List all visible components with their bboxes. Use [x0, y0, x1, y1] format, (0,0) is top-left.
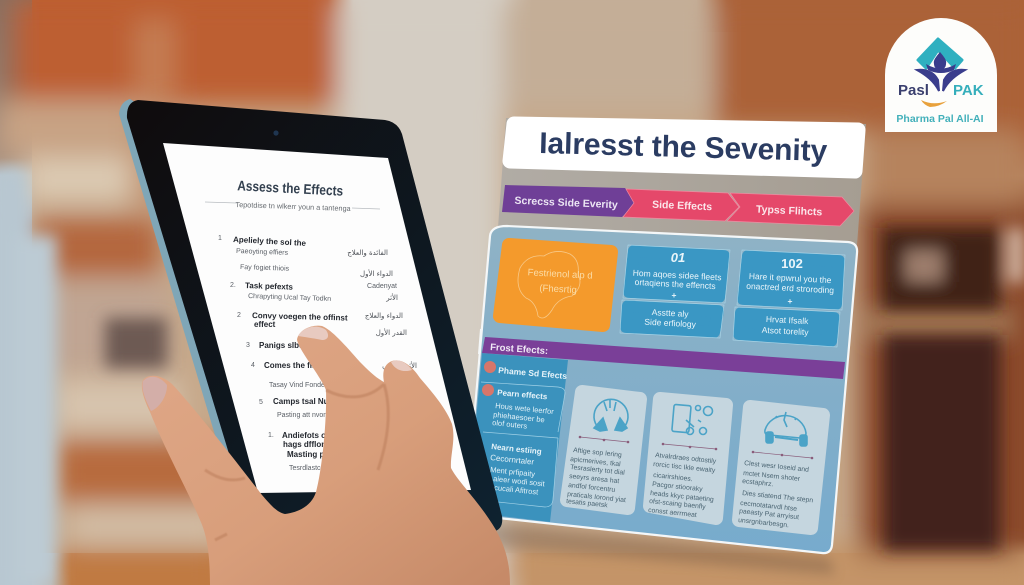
list block: nearn estiing: aieer wodi sosit — [493, 474, 546, 488]
divider with dots — [579, 436, 629, 443]
numbered list: 4 — [251, 362, 255, 369]
effect card 3: mctet Nsem shoter — [743, 470, 801, 483]
effect card 1 — [566, 392, 640, 509]
divider with dots — [752, 451, 813, 459]
numbered list: 2 — [237, 312, 241, 319]
effect card 1: praticals Iorond yiat — [567, 491, 626, 504]
middle finger nail — [391, 360, 412, 371]
badge: pharma side effects — [484, 361, 568, 381]
numbered list: Masting pu — [287, 450, 329, 459]
effect card 2: Atvalrdraes odtostily — [655, 452, 717, 465]
numbered list: Task pefexts — [245, 281, 294, 292]
right-hand annotations: الأثر — [385, 293, 398, 302]
badge: pearn effects: phiehaesoer be — [493, 410, 545, 424]
step arrows — [502, 185, 854, 226]
numbered list: Andiefots on — [282, 431, 331, 440]
numbered list: effect — [254, 320, 276, 329]
badge: pharma side effects: Phame Sd Efects — [498, 365, 568, 381]
numbered list: Tesrdlastcc — [289, 465, 325, 472]
logo badge — [885, 18, 997, 132]
right-hand annotations — [347, 249, 417, 370]
arrow: types — [727, 193, 854, 226]
effect card 1: seeyrs aresa hat — [569, 473, 620, 485]
step card 102: + — [788, 296, 793, 306]
badge: pearn effects: Hous wete leerfor — [495, 401, 555, 416]
effect card 2 — [648, 399, 726, 519]
tablet edge — [119, 99, 242, 492]
right-hand annotations: الفائدة والعلاج — [347, 249, 388, 257]
numbered list: Convy voegen the offinst — [252, 311, 348, 323]
tablet body — [127, 100, 502, 532]
icon: hands in circle — [594, 399, 628, 431]
right-hand annotations: الدواء الأول — [360, 269, 393, 278]
effect card 1: Tesraslerty tot dial — [570, 464, 625, 477]
logo badge: Pharma Pal All-AI — [896, 113, 984, 125]
arrow: screen side severity — [502, 185, 637, 217]
numbered list: 3 — [246, 342, 250, 349]
purple section bar — [479, 329, 845, 379]
right-hand annotations: القدر الأول — [376, 328, 407, 337]
list block: nearn estiing: Ment prfipaity — [490, 465, 536, 479]
title bar: Ialresst the Sevenity — [539, 127, 828, 168]
thumb nail — [142, 377, 167, 411]
numbered list: 5 — [259, 399, 263, 406]
list block: nearn estiing — [483, 432, 558, 507]
effect card 2: Pacgor stiooraky — [652, 481, 703, 493]
orange feature card: (Fhesrtig — [539, 283, 577, 296]
panel backing — [498, 118, 866, 245]
knuckle shading — [205, 384, 388, 540]
logo badge: Pasl — [898, 82, 929, 99]
step card 102: onactred erd stroroding — [746, 281, 835, 295]
icon: dome with weights — [765, 412, 807, 446]
numbered list: Chrapyting Ucal Tay Todkn — [248, 293, 331, 303]
panel shadow — [470, 520, 835, 575]
effect card 3: ecstaphrz. — [742, 478, 774, 488]
step card 01: ortaqiens the effencts — [634, 277, 716, 291]
numbered list: Fay fogiet thiois — [240, 264, 290, 273]
orange feature card — [500, 245, 611, 325]
step card 102: Hrvat Ifsalk — [766, 314, 809, 326]
numbered list — [218, 235, 348, 472]
numbered list: Tasay Vind Fonde — [269, 382, 325, 389]
list block: nearn estiing: cucali Afitrost — [494, 483, 540, 497]
step card 102: 102 — [781, 256, 803, 271]
step card 01 — [620, 245, 730, 338]
screen heading: Assess the Effects — [237, 177, 344, 199]
divider with dots — [662, 443, 717, 450]
tablet screen: Tepotdise tn wlkerr youn a tantenga — [235, 200, 352, 213]
tablet screen — [163, 143, 471, 493]
effect card 3: paeasty Pat arryisut — [739, 508, 799, 521]
step card 01: Asstte aly — [651, 307, 690, 319]
step card 102: Atsot torelity — [762, 325, 810, 337]
effect card 2: rorcic tisc Ikle ewaity — [653, 461, 716, 475]
effect card 1: Aftige sop lering — [573, 447, 622, 459]
logo emblem — [917, 39, 965, 91]
badge: pearn effects: olof outers — [492, 418, 528, 431]
numbered list: Camps tsal Nur — [273, 397, 332, 406]
arrow: types: Typss Flihcts — [756, 204, 823, 218]
list block: nearn estiing: Cecornrtaler — [490, 453, 535, 467]
step card 01: Hom aqoes sidee fleets — [633, 268, 722, 282]
hand — [142, 326, 510, 585]
camera — [273, 130, 279, 136]
numbered list: Pasting att nvon — [277, 412, 327, 419]
numbered list: 2. — [230, 282, 236, 289]
list block: nearn estiing: Nearn estiing — [491, 442, 542, 456]
effect card 2: heads kkyc pataeting — [650, 490, 714, 504]
arrow: screen side severity: Screcss Side Everity — [514, 195, 618, 211]
badge: pearn effects: Pearn effects — [497, 388, 548, 401]
numbered list: 1 — [218, 235, 222, 242]
right-hand annotations: الدواء والعلاج — [365, 312, 403, 320]
effect card 3: cecmotatarvdl htse — [740, 500, 797, 513]
index finger nail — [298, 327, 328, 340]
numbered list: hags dfflon — [283, 440, 326, 449]
effect card 1: apicmerives, tkal — [570, 456, 621, 468]
step card 102: Hare it epwrul you the — [749, 271, 832, 285]
arrow: side effects — [623, 189, 739, 221]
purple section bar: Frost Efects: — [490, 342, 548, 357]
icon: phone and bubbles — [672, 404, 712, 434]
orange feature card: Festrienol alp d — [527, 267, 593, 282]
right-hand annotations: الأثر الدوائي — [382, 361, 417, 370]
numbered list: Panigs slbc — [259, 341, 304, 350]
step card 01: 01 — [671, 250, 685, 265]
step card 01: Side erfiology — [644, 317, 697, 329]
logo badge: PAK — [953, 82, 984, 99]
numbered list: Apeliely the sol the — [233, 235, 307, 248]
arrow: side effects: Side Effects — [652, 199, 713, 213]
effect card 1: tesatis paetsk — [566, 498, 608, 509]
effect card 3: unsrgnbarbesgn. — [738, 517, 789, 529]
numbered list: 1. — [268, 432, 274, 439]
effect card 3: Clest wesr Ioseid and — [744, 460, 809, 474]
numbered list: Comes the fim — [264, 361, 319, 370]
severity infographic panel — [466, 118, 866, 553]
badge: pearn effects — [481, 382, 565, 432]
blue content panel — [466, 226, 857, 553]
right-hand annotations: Cadenyat — [367, 283, 397, 290]
numbered list: Paeoyting effiers — [236, 248, 289, 257]
tablet — [119, 99, 502, 532]
left column: effects list — [468, 353, 568, 522]
step card 102 — [733, 250, 845, 347]
effect card 2: consst aerrmeat — [648, 507, 697, 519]
palm and fingers — [142, 326, 510, 585]
effect card 2: ofst-scaing baenfly — [649, 498, 706, 511]
step card 01: + — [672, 290, 677, 300]
effect card 3 — [738, 407, 823, 529]
effect card 2: cicarirshioes. — [653, 472, 693, 483]
effect card 1: andfol forcentru — [568, 482, 616, 494]
effect card 3: Dies stiatend The stepn — [742, 490, 814, 504]
